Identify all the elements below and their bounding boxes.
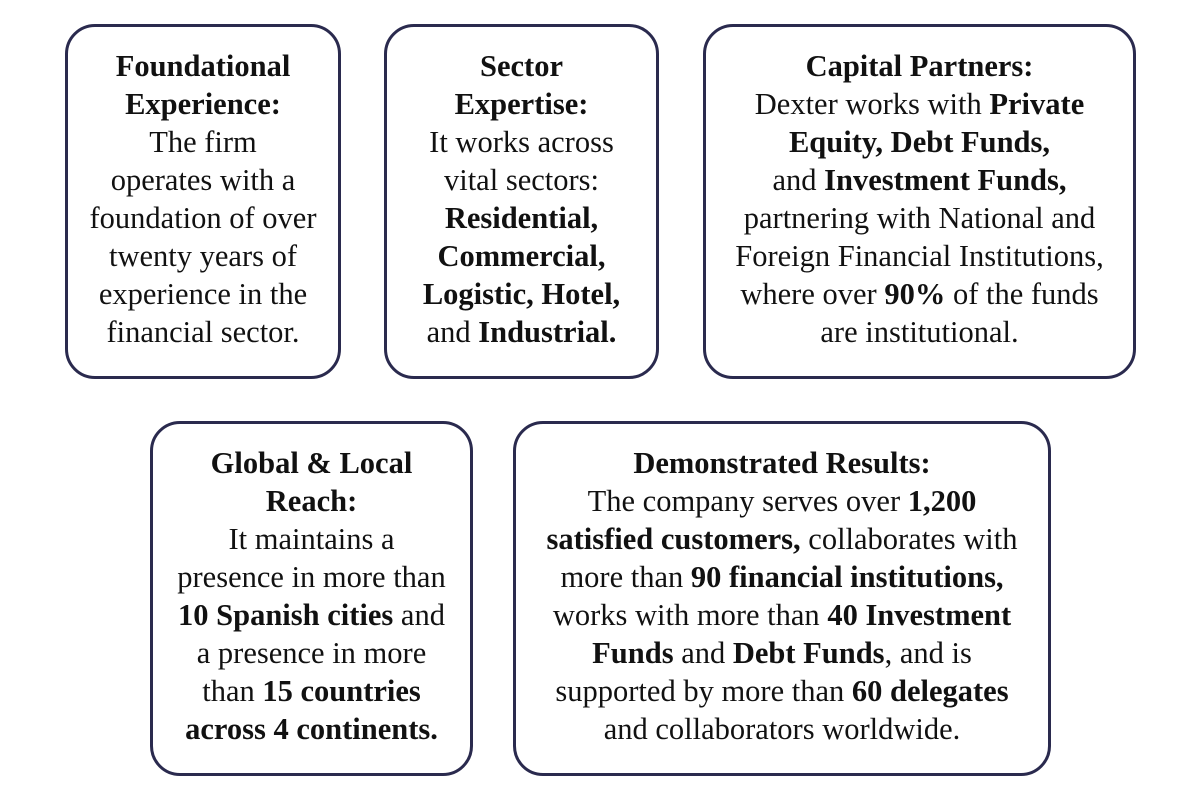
panel: global and local reach: across 4 continents. — [185, 712, 438, 746]
panel: global and local reach: Global & Local — [211, 446, 412, 480]
panel: demonstrated results: The company serves over 1,200 — [588, 484, 976, 518]
panel: demonstrated results: and collaborators worldwide. — [604, 712, 960, 746]
panel: capital partners — [703, 24, 1136, 379]
panel: foundational experience: Experience: — [125, 87, 281, 121]
panel: foundational experience: twenty years of — [109, 239, 297, 273]
panel: capital partners: are institutional. — [820, 315, 1019, 349]
panel: demonstrated results — [513, 421, 1051, 776]
panel: demonstrated results: supported by more than 60 delegates — [555, 674, 1009, 708]
panel: global and local reach: Reach: — [266, 484, 357, 518]
panel: sector expertise — [384, 24, 659, 379]
panel: foundational experience: foundation of over — [90, 201, 316, 235]
panel: global and local reach: presence in more than — [177, 560, 446, 594]
panel: sector expertise: Expertise: — [455, 87, 588, 121]
panel: sector expertise: vital sectors: — [444, 163, 599, 197]
panel: capital partners: Dexter works with Private — [755, 87, 1084, 121]
panel: foundational experience — [65, 24, 341, 379]
panel: demonstrated results: satisfied customers, collaborates with — [547, 522, 1017, 556]
panel: foundational experience: Foundational — [116, 49, 290, 83]
panel: foundational experience: financial sector. — [106, 315, 300, 349]
panel: global and local reach: than 15 countries — [202, 674, 421, 708]
panel: global and local reach: 10 Spanish cities and — [178, 598, 445, 632]
panel: demonstrated results: Funds and Debt Funds, and is — [592, 636, 972, 670]
panel: capital partners: partnering with National and — [744, 201, 1095, 235]
panel: capital partners: Equity, Debt Funds, — [789, 125, 1050, 159]
panel: sector expertise: Commercial, — [438, 239, 605, 273]
panel: sector expertise: Sector — [480, 49, 563, 83]
panel: demonstrated results: more than 90 financial institutions, — [560, 560, 1004, 594]
panel: global and local reach — [150, 421, 473, 776]
panel: capital partners: and Investment Funds, — [772, 163, 1067, 197]
panel: global and local reach: It maintains a — [228, 522, 394, 556]
panel: capital partners: Foreign Financial Institutions, — [735, 239, 1104, 273]
panel: foundational experience: The firm — [149, 125, 257, 159]
panel: foundational experience: operates with a — [111, 163, 295, 197]
panel: foundational experience: experience in the — [99, 277, 307, 311]
panel: capital partners: Capital Partners: — [806, 49, 1033, 83]
panel: sector expertise: It works across — [429, 125, 614, 159]
panel: capital partners: where over 90% of the funds — [740, 277, 1099, 311]
panel: demonstrated results: works with more than 40 Investment — [553, 598, 1011, 632]
panel: global and local reach: a presence in more — [197, 636, 426, 670]
panel: demonstrated results: Demonstrated Results: — [633, 446, 931, 480]
panel: sector expertise: and Industrial. — [427, 315, 616, 349]
panel: sector expertise: Residential, — [445, 201, 598, 235]
panel: sector expertise: Logistic, Hotel, — [423, 277, 620, 311]
